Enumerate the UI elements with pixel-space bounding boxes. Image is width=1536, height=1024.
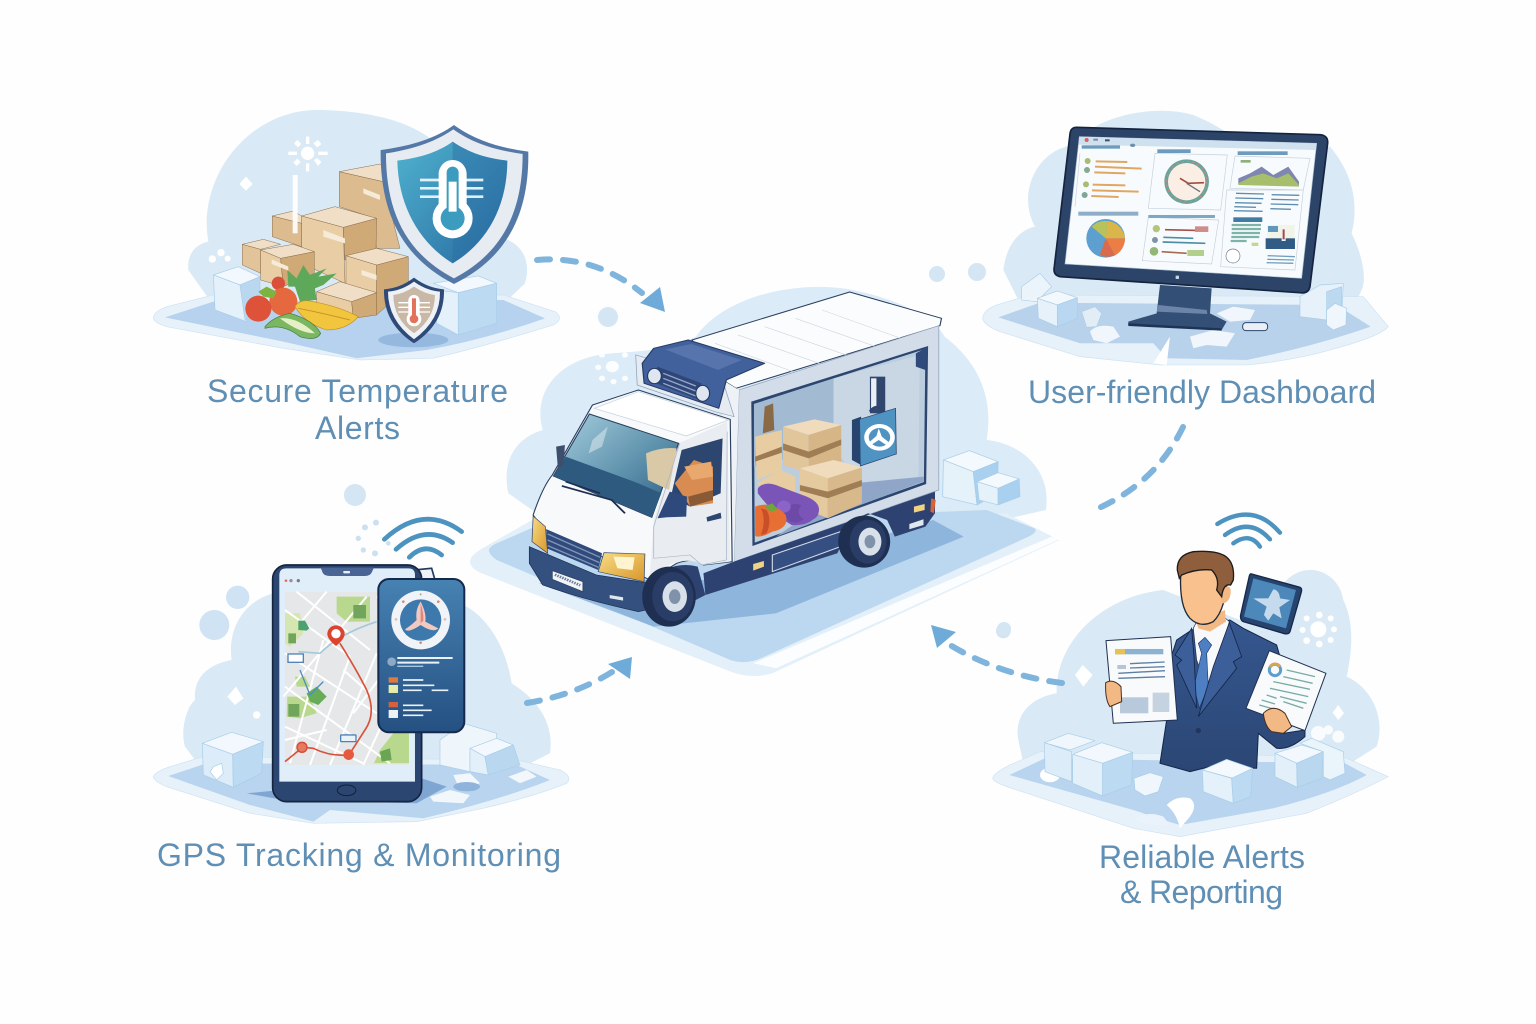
tablet: [273, 565, 422, 802]
sparkles: [1075, 665, 1344, 720]
mirror: [658, 492, 687, 518]
arrow: reporting to truck: [931, 625, 1062, 683]
refrigeration unit: [636, 340, 765, 417]
cloud backdrop: [1003, 111, 1364, 323]
zucchini: [265, 313, 321, 339]
ice cubes: [213, 267, 497, 335]
large shield with thermometer: [381, 125, 528, 284]
map: [283, 592, 409, 765]
monitor stand: [1128, 285, 1227, 331]
panel: reliable alerts and reporting: [993, 515, 1388, 837]
table and figure: [1226, 217, 1295, 263]
chassis: [703, 492, 935, 595]
sun icon: [288, 137, 328, 171]
lapels: [1175, 628, 1197, 708]
hanging temperature tag: [852, 407, 896, 466]
cab side window: [671, 438, 723, 507]
notch: [321, 568, 374, 576]
roof ribs: [715, 310, 910, 377]
ice cubes: [1022, 273, 1347, 330]
man: [1160, 551, 1305, 772]
cloud backdrop: [507, 287, 1047, 553]
leaves: [287, 265, 337, 302]
pie chart: [1078, 212, 1138, 258]
label: reliable alerts: Reliable Alerts: [1099, 839, 1305, 875]
ice cubes: [1044, 733, 1345, 803]
cloud backdrop: [183, 593, 551, 787]
head: [1180, 564, 1227, 624]
bumper: [529, 547, 654, 612]
panel outlines: [1075, 153, 1310, 270]
ice cubes: [943, 451, 1020, 505]
platform: [993, 752, 1388, 837]
app tile: [1241, 574, 1302, 634]
monitor frame: [1054, 127, 1328, 293]
power button: [1176, 276, 1179, 279]
ice cubes: [202, 723, 520, 787]
decorative circles: [199, 610, 229, 640]
arrow: GPS to truck: [527, 657, 632, 703]
arrow: temperature alerts to truck: [537, 259, 665, 312]
snowflake icon: [595, 345, 628, 384]
cab roof: [594, 392, 728, 436]
location pin: [327, 625, 345, 646]
platform: [153, 757, 569, 823]
cloud backdrop: [1018, 570, 1380, 770]
route: [285, 643, 371, 762]
wifi icon: [1217, 515, 1280, 547]
sparkle: [227, 687, 243, 705]
status rows: [1148, 215, 1215, 256]
label: alerts: Alerts: [315, 410, 400, 446]
suit: [1160, 620, 1305, 772]
grille: [547, 529, 602, 570]
tablet shadow: [247, 777, 447, 803]
rear wheel: [838, 516, 890, 568]
report right: [1246, 651, 1326, 733]
wipers: [562, 482, 625, 513]
bananas: [295, 301, 358, 330]
gps tracker clip: [408, 568, 435, 580]
produce: [245, 265, 358, 339]
label: and reporting: & Reporting: [1120, 874, 1283, 910]
left hand: [1106, 681, 1122, 707]
cab: [529, 390, 732, 612]
panel: secure temperature alerts: [153, 110, 560, 360]
cargo boxes: [755, 403, 862, 518]
platform: [983, 295, 1388, 365]
marker lights: [753, 504, 925, 571]
signal dots: [356, 520, 391, 556]
hair: [1177, 551, 1234, 597]
label: GPS tracking and monitoring: GPS Tracking & Monitoring: [157, 837, 561, 873]
list: orange bars: [1082, 158, 1142, 198]
truck shadow: [539, 520, 964, 627]
label: user-friendly dashboard: User-friendly Dashboard: [1028, 374, 1376, 410]
wifi icon: [384, 519, 462, 557]
snow flake: [1300, 612, 1337, 647]
platform: [470, 510, 1059, 676]
sparkle: [239, 177, 253, 191]
cloud backdrop: [188, 110, 527, 323]
panel: user-friendly dashboard: [983, 111, 1388, 365]
front wheel: [642, 565, 705, 627]
tie: [1194, 637, 1212, 708]
text lines: [1234, 193, 1299, 211]
cargo interior window: [751, 346, 928, 546]
headlights: [532, 516, 548, 553]
clock gauge: [1164, 159, 1209, 204]
label: secure temperature alerts: Secure Temperature: [207, 373, 508, 409]
chassis side panel: [772, 532, 840, 572]
door outline: [654, 432, 727, 565]
neck and shirt: [1193, 613, 1229, 687]
platform: [153, 295, 560, 360]
small shield: [378, 278, 448, 347]
tracker card: [378, 579, 464, 732]
white post: [293, 175, 298, 233]
report left: [1106, 637, 1177, 723]
dial: [391, 591, 450, 649]
cargo box side: [734, 326, 939, 562]
right hand: [1263, 708, 1292, 733]
panel: GPS tracking and monitoring: [153, 519, 569, 823]
box tape highlights: [272, 188, 380, 280]
door handle: [707, 513, 721, 522]
panel: central truck: [470, 287, 1059, 676]
arrow: dashboard to truck: [1092, 427, 1183, 511]
produce: eggplant and peppers: [755, 484, 819, 537]
decorative dots: [344, 263, 1011, 636]
card rows: [387, 657, 396, 666]
license plate: [552, 571, 583, 592]
area chart: [1238, 160, 1299, 187]
mouse: [1243, 323, 1268, 331]
windshield: [553, 414, 679, 517]
screen widgets: [1075, 137, 1317, 270]
screen: [1065, 137, 1317, 278]
cargo box roof: [692, 292, 941, 388]
cardboard boxes: [242, 164, 408, 318]
